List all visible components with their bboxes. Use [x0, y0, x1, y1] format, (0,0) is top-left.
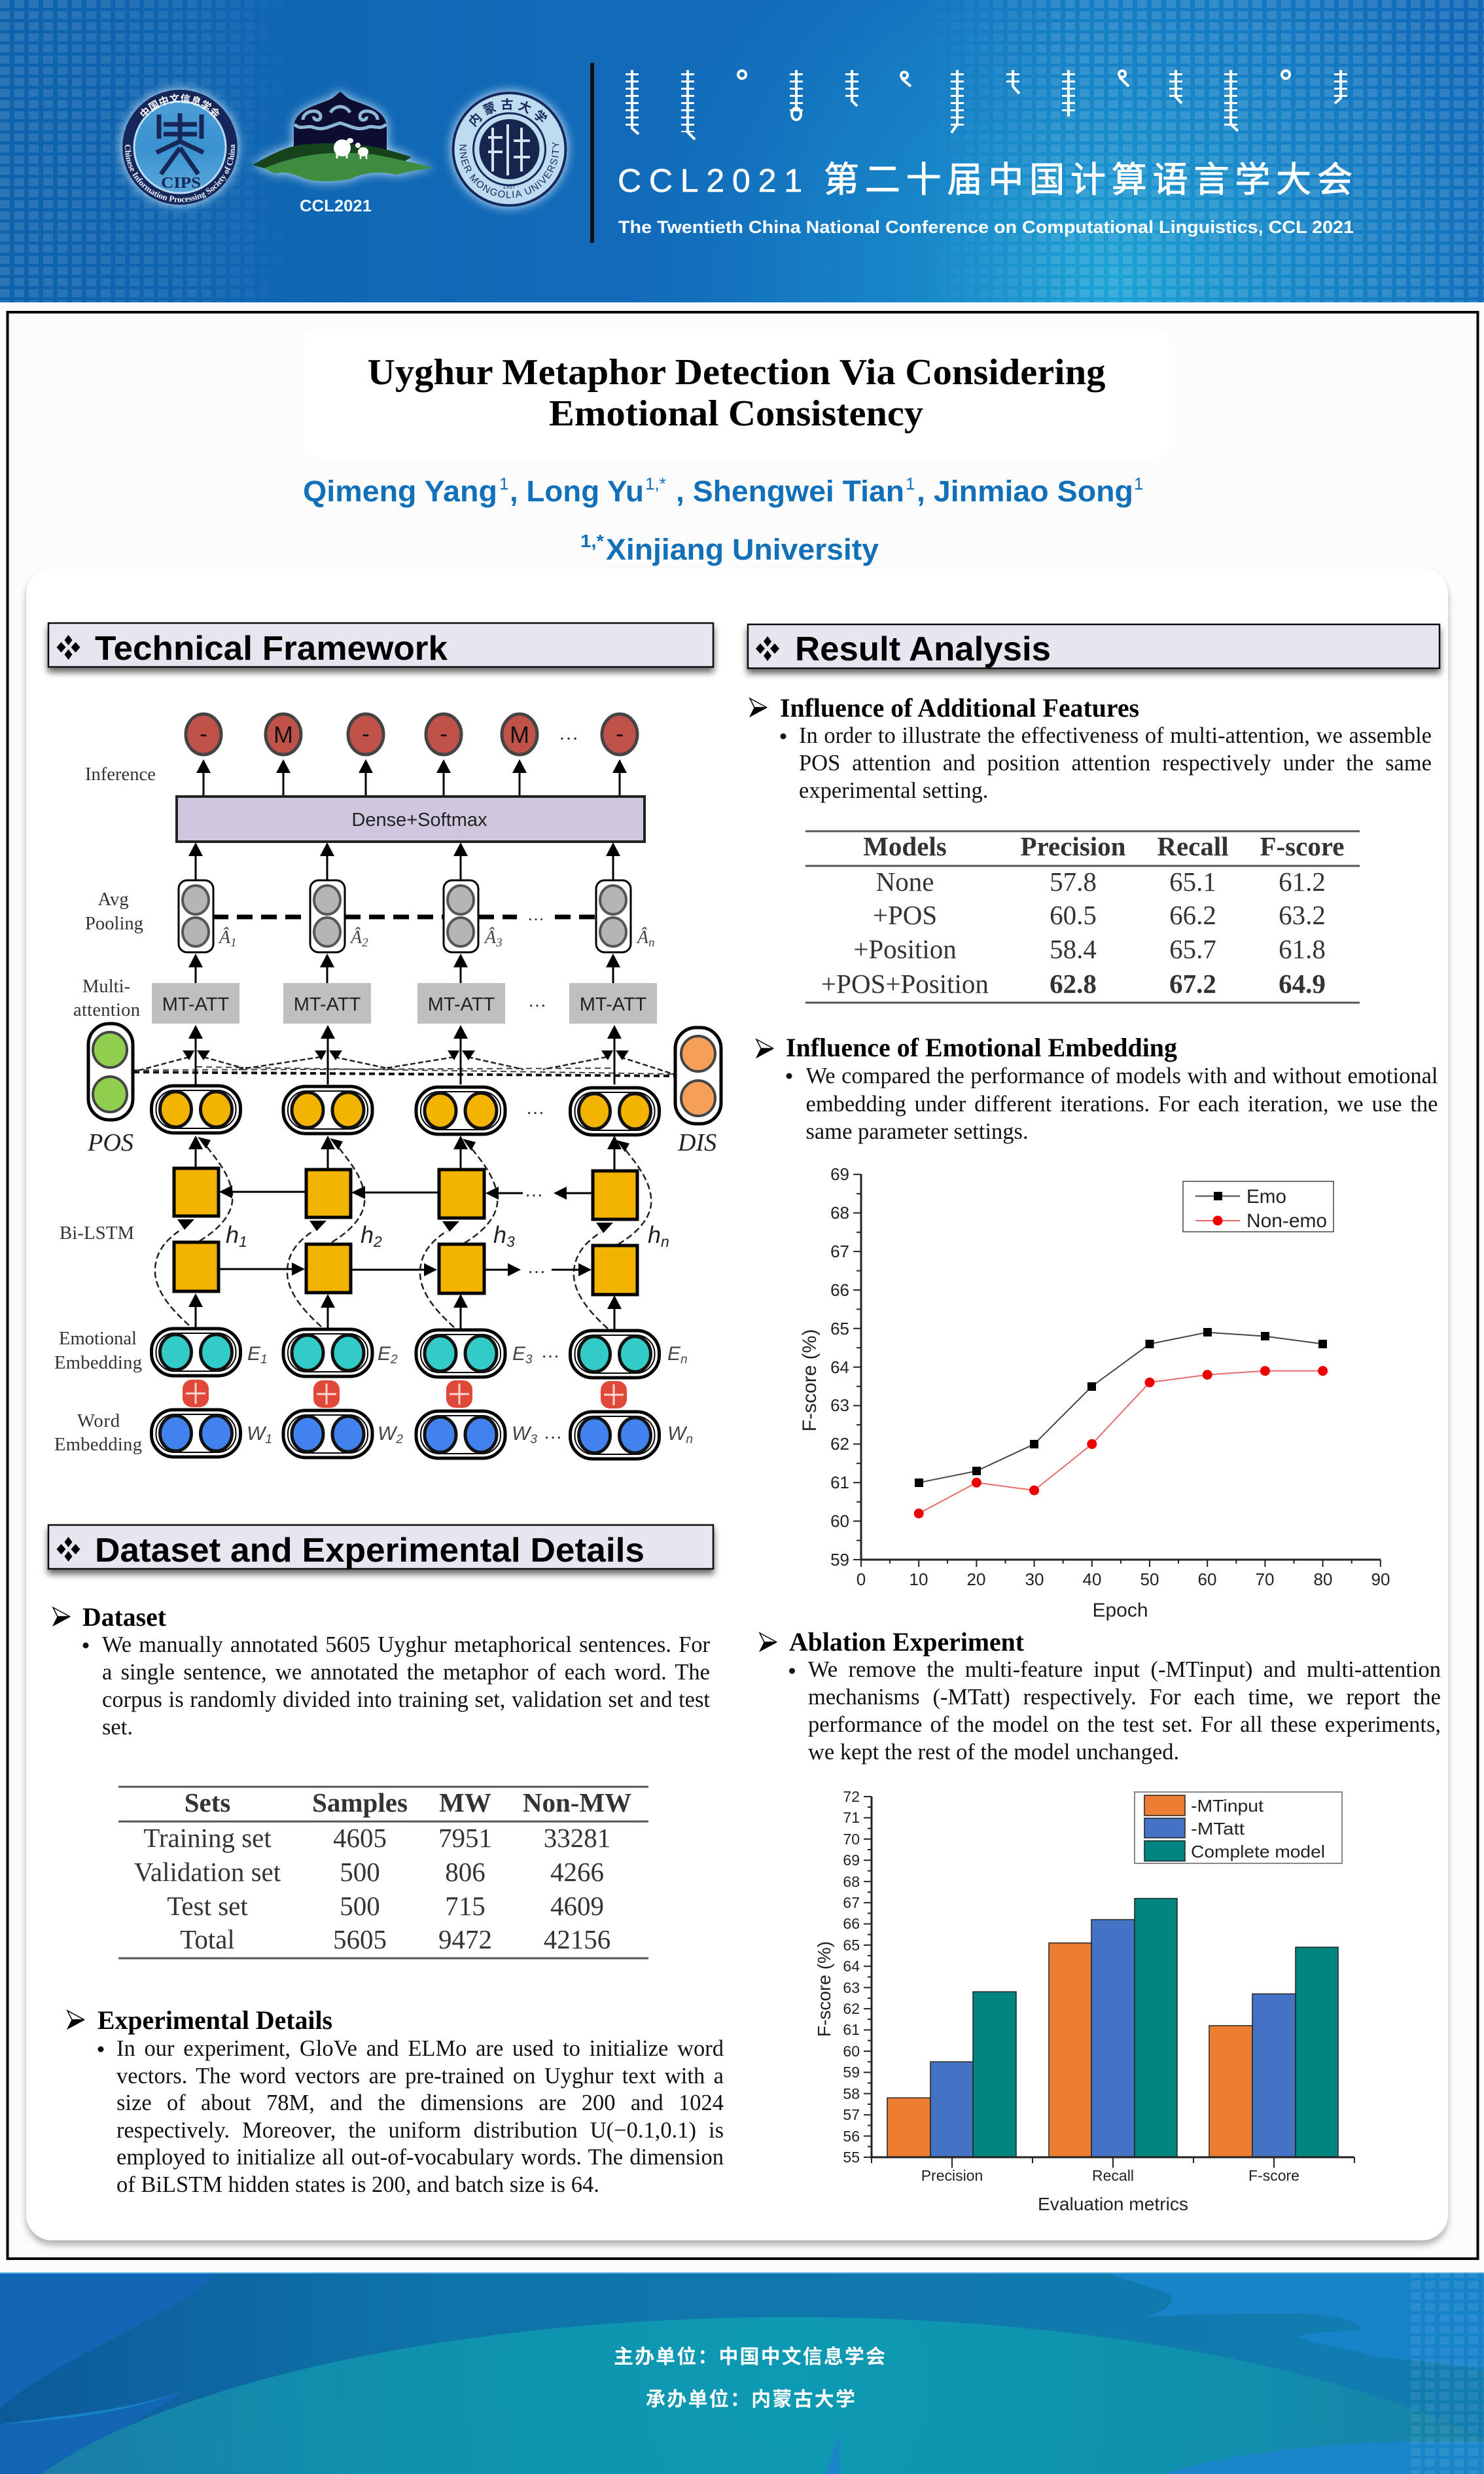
- authors: , Long Yu: [510, 475, 644, 508]
- axis titles: [799, 1329, 1148, 1621]
- text: ablation experiment: mechanisms (-MTatt) respectively. For each time, we report the: [808, 1685, 1441, 1710]
- authors: 1: [1134, 474, 1143, 493]
- y tick labels: 55: [843, 2149, 860, 2166]
- series: Non-emo: [914, 1366, 1328, 1518]
- heading: Technical Framework: Technical Framework: [95, 630, 448, 668]
- logo: Inner Mongolia University: · 1957 ·: [499, 183, 520, 190]
- y tick labels: 63: [843, 1979, 860, 1996]
- x tick labels: 50: [1140, 1569, 1159, 1589]
- y tick labels: [843, 1788, 860, 2166]
- word embedding row: …: [544, 1423, 562, 1443]
- text: dataset description: [82, 1632, 724, 1746]
- text: emotional embedding: [786, 1062, 1454, 1151]
- Dense+Softmax layer: Dense+Softmax: [351, 810, 487, 831]
- table: dataset statistics: 4605: [333, 1823, 387, 1853]
- word embedding row: n: [686, 1433, 693, 1446]
- Bi-LSTM cells: [155, 1136, 669, 1330]
- emotional embedding row: [152, 1329, 688, 1378]
- emotional embedding row: E: [667, 1343, 680, 1365]
- axes: [861, 1174, 1381, 1560]
- series: Emo: [915, 1328, 1327, 1487]
- authors: 1,*: [645, 474, 666, 493]
- table: dataset statistics: 9472: [438, 1924, 492, 1954]
- subheading: Influence of Emotional Embedding: Influence of Emotional Embedding: [786, 1033, 1177, 1062]
- header banner: [0, 0, 1484, 302]
- table: feature results: Recall: [1157, 831, 1229, 861]
- authors: Qimeng Yang: [303, 475, 497, 508]
- table: dataset statistics: 42156: [544, 1924, 610, 1954]
- footer banner: [0, 2272, 1484, 2474]
- avg pooling row: Â: [219, 927, 230, 948]
- Bi-LSTM cells: 1: [239, 1233, 247, 1250]
- table: feature results: 61.2: [1279, 867, 1326, 897]
- x tick labels: 40: [1083, 1569, 1101, 1589]
- x tick labels: 20: [967, 1569, 985, 1589]
- text: experimental details: [98, 2035, 738, 2206]
- subheading: Ablation Experiment: Ablation Experiment: [789, 1628, 1025, 1657]
- word embedding row: W: [512, 1423, 530, 1444]
- word embedding row: W: [247, 1423, 265, 1444]
- Bi-LSTM cells: …: [527, 1257, 546, 1278]
- y tick labels: 62: [830, 1434, 849, 1454]
- y tick labels: 69: [830, 1164, 849, 1184]
- text: dataset description: corpus is randomly divided into training set, validation set and test: [102, 1687, 710, 1712]
- content card: [26, 568, 1448, 2240]
- logo: CIPS: CIPS: [161, 175, 201, 192]
- table: dataset statistics: 7951: [438, 1823, 492, 1853]
- x category labels: F-score: [1248, 2167, 1299, 2184]
- POS attention: POS: [87, 1129, 133, 1156]
- panel: dataset and experimental details: [48, 1525, 738, 2206]
- multi-attention boxes: MT-ATT: [294, 994, 361, 1015]
- y tick labels: 56: [843, 2128, 860, 2145]
- Bi-LSTM cells: h: [226, 1221, 239, 1248]
- y tick labels: 61: [843, 2021, 860, 2038]
- y tick labels: 67: [843, 1894, 860, 1911]
- y tick labels: [830, 1164, 849, 1569]
- avg pooling row: 1: [230, 936, 237, 950]
- y tick labels: 59: [843, 2064, 860, 2081]
- logo: CIPS: Chinese Information Processing Society of China: [124, 144, 236, 202]
- text: emotional embedding: We compared the performance of models with and without emotional: [806, 1064, 1438, 1088]
- title: Emotional Consistency: [549, 393, 923, 434]
- Bi-LSTM cells: 3: [506, 1233, 515, 1250]
- subheading: Influence of Additional Features: Influence of Additional Features: [780, 694, 1139, 723]
- table: dataset statistics: MW: [439, 1787, 491, 1818]
- legend: [1183, 1181, 1334, 1232]
- table: feature results: 63.2: [1279, 900, 1326, 930]
- avg pooling row: 2: [362, 936, 368, 950]
- diagram: model architecture: [54, 714, 721, 1459]
- table: dataset statistics: Training set: [143, 1823, 272, 1853]
- host organisation text: 主办单位：中国中文信息学会: [614, 2346, 885, 2368]
- x category labels: [921, 2167, 1299, 2184]
- table: feature results: 60.5: [1050, 900, 1097, 930]
- text: experimental details: employed to initialize all out-of-vocabulary words. The dimension: [116, 2145, 724, 2170]
- logo: CCL2021 yurt: CCL2021: [300, 197, 372, 215]
- text: ablation experiment: We remove the multi-feature input (-MTinput) and multi-attention: [808, 1657, 1441, 1682]
- decorative Mongolian script band: [632, 70, 1341, 139]
- y tick labels: 60: [843, 2043, 860, 2060]
- y tick labels: 71: [843, 1809, 860, 1826]
- axis titles: [814, 1941, 1188, 2214]
- legend: Non-emo: [1246, 1210, 1327, 1232]
- inference outputs: -: [362, 720, 370, 747]
- Bi-LSTM cells: h: [648, 1221, 661, 1248]
- layer labels: Bi-LSTM: [60, 1223, 134, 1244]
- DIS attention: [675, 1028, 721, 1156]
- word embedding row: 2: [395, 1433, 403, 1446]
- text: dataset description: a single sentence, we annotated the metaphor of each word. The: [102, 1660, 710, 1685]
- logo: Inner Mongolia University: [444, 84, 575, 215]
- layer labels: Emotional: [59, 1329, 137, 1349]
- multi-attention boxes: …: [528, 991, 546, 1011]
- text: experimental details: respectively. Moreover, the uniform distribution U(−0.1,0.1) is: [116, 2118, 724, 2143]
- heading: Result Analysis: [748, 624, 1440, 668]
- avg pooling row: Â: [637, 927, 648, 948]
- layer labels: [54, 764, 156, 1455]
- concat hidden row: …: [526, 1098, 544, 1119]
- Chinese conference title: 第二十届中国计算语言学大会: [824, 160, 1352, 200]
- x category labels: Precision: [921, 2167, 983, 2184]
- DIS attention: DIS: [677, 1129, 716, 1156]
- avg pooling row: n: [648, 936, 655, 950]
- text: emotional embedding: embedding under different iterations. For each iteration, we use the: [806, 1092, 1438, 1117]
- table: dataset statistics: [118, 1787, 648, 1958]
- authors: [303, 474, 1143, 508]
- text: dataset description: set.: [102, 1715, 133, 1740]
- y tick labels: 64: [843, 1958, 860, 1975]
- avg pooling row: 3: [495, 936, 503, 950]
- inference outputs: …: [559, 723, 578, 744]
- text: experimental details: vectors. The word vectors are pre-trained on Uyghur text with a: [116, 2064, 724, 2089]
- bars: Recall: [1049, 1899, 1177, 2157]
- x tick labels: 10: [910, 1569, 928, 1589]
- layer labels: Word: [77, 1411, 120, 1431]
- word embedding row: [152, 1410, 693, 1459]
- Bi-LSTM cells: n: [661, 1233, 669, 1250]
- logo: Inner Mongolia University: 内蒙古大学: [468, 98, 548, 127]
- main frame: [8, 312, 1477, 2259]
- layer labels: attention: [73, 1000, 140, 1020]
- table: feature results: 64.9: [1279, 969, 1326, 999]
- authors: , Shengwei Tian: [676, 475, 904, 508]
- text: additional features: experimental setting.: [799, 778, 988, 803]
- text: additional features: POS attention and position attention respectively under the same: [799, 751, 1432, 776]
- emotional embedding row: E: [247, 1343, 260, 1365]
- table: dataset statistics: 715: [445, 1891, 486, 1921]
- table: feature results: [805, 831, 1360, 1003]
- x tick labels: 60: [1198, 1569, 1216, 1589]
- host organisation text: [614, 2346, 885, 2411]
- emotional embedding row: 1: [260, 1353, 268, 1367]
- emotional embedding row: 2: [390, 1353, 398, 1367]
- y tick labels: 65: [843, 1937, 860, 1954]
- x category labels: Recall: [1092, 2167, 1134, 2184]
- legend: Complete model: [1191, 1842, 1325, 1861]
- Bi-LSTM cells: h: [361, 1221, 374, 1248]
- table: dataset statistics: Test set: [167, 1891, 248, 1921]
- legend: Emo: [1246, 1186, 1286, 1208]
- table: dataset statistics: 4266: [550, 1857, 604, 1887]
- table: dataset statistics: Sets: [185, 1787, 230, 1818]
- axis titles: Evaluation metrics: [1038, 2194, 1188, 2214]
- x tick labels: 70: [1256, 1569, 1274, 1589]
- POS attention: [87, 1024, 133, 1156]
- table: dataset statistics: Validation set: [134, 1857, 281, 1887]
- y tick labels: 62: [843, 2000, 860, 2017]
- English conference title: The Twentieth China National Conference on Computational Linguistics, CCL 2021: [618, 217, 1354, 237]
- subheading: Dataset: Dataset: [82, 1603, 167, 1632]
- inference outputs: -: [200, 720, 207, 747]
- legend: -MTatt: [1191, 1819, 1245, 1838]
- title: Uyghur Metaphor Detection Via Considering: [368, 352, 1106, 393]
- attention dashed connections: [133, 1025, 675, 1085]
- table: dataset statistics: Total: [180, 1924, 235, 1954]
- text: dataset description: We manually annotated 5605 Uyghur metaphorical sentences. For: [102, 1632, 710, 1657]
- table: feature results: +POS+Position: [821, 969, 989, 999]
- Bi-LSTM cells: 2: [373, 1233, 382, 1250]
- avg pooling row: [179, 842, 655, 983]
- table: feature results: 58.4: [1050, 934, 1097, 964]
- affiliation: Xinjiang University: [606, 533, 879, 566]
- table: dataset statistics: 500: [340, 1857, 380, 1887]
- legend: -MTinput: [1191, 1796, 1264, 1816]
- y tick labels: 66: [830, 1280, 849, 1300]
- logo: CIPS: 中国中文信息学会: [140, 94, 220, 118]
- y tick labels: 68: [843, 1873, 860, 1890]
- table: dataset statistics: 5605: [333, 1924, 387, 1954]
- text: experimental details: size of about 78M, and the dimensions are 200 and 1024: [116, 2090, 724, 2115]
- multi-attention boxes: MT-ATT: [162, 994, 230, 1015]
- table: dataset statistics: 4609: [550, 1891, 604, 1921]
- x tick labels: [857, 1569, 1390, 1589]
- emotional embedding row: 3: [525, 1353, 533, 1367]
- table: feature results: 66.2: [1169, 900, 1216, 930]
- text: ablation experiment: performance of the model on the test set. For all these experiments,: [808, 1712, 1441, 1737]
- table: dataset statistics: Samples: [312, 1787, 408, 1818]
- y tick labels: 66: [843, 1915, 860, 1932]
- y tick labels: 58: [843, 2085, 860, 2102]
- table: feature results: +Position: [853, 934, 957, 964]
- y tick labels: 64: [830, 1357, 849, 1377]
- bars: F-score: [1209, 1947, 1338, 2157]
- divider: [590, 63, 594, 243]
- table: feature results: F-score: [1260, 831, 1345, 861]
- avg pooling row: Â: [485, 927, 496, 948]
- axis titles: Epoch: [1092, 1600, 1148, 1621]
- emotional embedding row: …: [541, 1342, 559, 1362]
- y tick labels: 59: [830, 1550, 849, 1569]
- authors: , Jinmiao Song: [917, 475, 1133, 508]
- axis titles: F-score (%): [799, 1329, 821, 1431]
- text: experimental details: of BiLSTM hidden states is 200, and batch size is 64.: [116, 2172, 599, 2197]
- inference outputs: -: [440, 720, 448, 747]
- y tick labels: 57: [843, 2106, 860, 2123]
- table: dataset statistics: 500: [340, 1891, 380, 1921]
- y tick labels: 67: [830, 1242, 849, 1261]
- table: feature results: 65.1: [1169, 867, 1216, 897]
- subheading: Experimental Details: Experimental Details: [97, 2006, 332, 2035]
- avg pooling row: Â: [351, 927, 362, 948]
- y tick labels: 72: [843, 1788, 860, 1805]
- table: feature results: +POS: [873, 900, 937, 930]
- add operators: [183, 1380, 627, 1408]
- bar chart: ablation F-score: [814, 1788, 1354, 2214]
- bars: Precision: [887, 1992, 1016, 2157]
- Bi-LSTM cells: …: [525, 1181, 543, 1201]
- y tick labels: 69: [843, 1852, 860, 1869]
- word embedding row: W: [667, 1423, 686, 1444]
- heading: Technical Framework: [48, 623, 713, 668]
- y tick labels: 68: [830, 1203, 849, 1223]
- x tick labels: 90: [1371, 1569, 1390, 1589]
- y tick labels: 65: [830, 1319, 849, 1338]
- layer labels: Multi-: [82, 977, 130, 997]
- Chinese conference title: CCL2021: [618, 162, 802, 199]
- inference outputs: -: [616, 720, 624, 747]
- logo: CCL2021 yurt: [253, 92, 434, 215]
- table: feature results: None: [876, 867, 934, 897]
- text: additional features: In order to illustrate the effectiveness of multi-attention, we assemble: [799, 723, 1432, 748]
- heading: Result Analysis: Result Analysis: [795, 630, 1051, 668]
- authors: 1: [906, 474, 915, 493]
- multi-attention boxes: MT-ATT: [428, 994, 495, 1015]
- table: feature results: Models: [863, 831, 947, 861]
- table: feature results: 61.8: [1279, 934, 1326, 964]
- y tick labels: 61: [830, 1473, 849, 1492]
- table: feature results: 65.7: [1169, 934, 1216, 964]
- text: experimental details: In our experiment, GloVe and ELMo are used to initialize word: [116, 2036, 724, 2061]
- panel: technical framework: [48, 623, 721, 1459]
- panel: result analysis: [748, 624, 1456, 2214]
- axis titles: F-score (%): [814, 1941, 834, 2037]
- layer labels: Avg: [98, 889, 129, 910]
- table: feature results: 62.8: [1050, 969, 1097, 999]
- Dense+Softmax layer: [177, 797, 645, 842]
- concat hidden row: [152, 1086, 660, 1135]
- table: feature results: 57.8: [1050, 867, 1097, 897]
- legend: [1135, 1792, 1342, 1863]
- word embedding row: 1: [265, 1433, 272, 1446]
- layer labels: Embedding: [54, 1435, 142, 1455]
- inference outputs: M: [274, 721, 293, 748]
- table: feature results: Precision: [1021, 831, 1126, 861]
- y tick labels: 60: [830, 1511, 849, 1531]
- text: ablation experiment: [789, 1656, 1456, 1770]
- affiliation: 1,*: [580, 531, 604, 551]
- x tick labels: 0: [857, 1569, 866, 1589]
- layer labels: Inference: [85, 764, 156, 785]
- text: ablation experiment: we kept the rest of the model unchanged.: [808, 1740, 1179, 1765]
- heading: Dataset and Experimental Details: Dataset and Experimental Details: [95, 1532, 645, 1569]
- Bi-LSTM cells: h: [493, 1221, 506, 1248]
- word embedding row: W: [378, 1423, 396, 1444]
- line chart: F-score by epoch: [799, 1164, 1390, 1621]
- text: additional features: [780, 722, 1447, 810]
- multi-attention boxes: MT-ATT: [580, 994, 647, 1015]
- layer labels: Embedding: [54, 1353, 142, 1373]
- table: dataset statistics: Non-MW: [523, 1787, 631, 1818]
- heading: Dataset and Experimental Details: [48, 1525, 713, 1569]
- emotional embedding row: E: [512, 1343, 525, 1365]
- organizer text: 承办单位：内蒙古大学: [646, 2388, 855, 2411]
- x tick labels: 30: [1025, 1569, 1044, 1589]
- word embedding row: 3: [530, 1433, 537, 1446]
- layer labels: Pooling: [85, 914, 143, 934]
- title box: [303, 329, 1169, 458]
- logo: CIPS: [114, 81, 246, 213]
- avg pooling row: …: [527, 905, 544, 924]
- inference outputs: [186, 714, 637, 797]
- emotional embedding row: n: [680, 1353, 688, 1367]
- text: emotional embedding: same parameter settings.: [806, 1119, 1029, 1144]
- inference outputs: M: [510, 721, 529, 748]
- x tick labels: 80: [1314, 1569, 1332, 1589]
- title: [368, 352, 1106, 434]
- y tick labels: 63: [830, 1395, 849, 1415]
- y tick labels: 70: [843, 1831, 860, 1848]
- table: dataset statistics: 33281: [544, 1823, 610, 1853]
- table: dataset statistics: 806: [445, 1857, 486, 1887]
- table: feature results: 67.2: [1169, 969, 1216, 999]
- authors: 1: [499, 474, 508, 493]
- multi-attention boxes: [152, 983, 657, 1024]
- axes: [872, 1797, 1354, 2157]
- emotional embedding row: E: [378, 1343, 391, 1365]
